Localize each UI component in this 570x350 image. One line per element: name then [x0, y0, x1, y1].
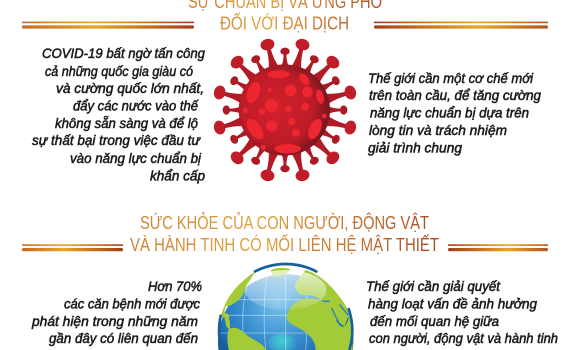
text block: COVID-19 impact: đẩy các nước vào thế: [73, 98, 199, 114]
divider bars right of second heading: [448, 244, 548, 251]
text block: global issues to address: [366, 278, 558, 346]
globe rim: [219, 264, 352, 350]
text block: global mechanism: [368, 70, 541, 156]
text block: global issues to address: đến mối quan hệ giữa: [370, 313, 499, 329]
text block: 70 percent of diseases: gần đây có liên quan đến: [49, 330, 198, 346]
text block: COVID-19 impact: [32, 45, 205, 184]
text block: global issues to address: hàng loạt vấn đề ảnh hưởng: [368, 296, 537, 312]
Africa and Eurasia: [287, 298, 353, 350]
text block: global mechanism: trên toàn cầu, để tăng cường: [369, 87, 541, 103]
text block: global issues to address: con người, động vật và hành tinh: [369, 330, 558, 346]
text block: 70 percent of diseases: phát hiện trong những năm: [31, 313, 198, 329]
text block: 70 percent of diseases: [31, 278, 202, 346]
South America: [227, 328, 266, 350]
text block: 70 percent of diseases: Hơn 70%: [148, 278, 202, 294]
heading: preparedness and response: [188, 0, 382, 34]
continents: [221, 268, 353, 350]
text block: COVID-19 impact: sự thất bại trong việc đầu tư: [32, 132, 201, 148]
text block: COVID-19 impact: COVID-19 bất ngờ tấn công: [42, 45, 205, 61]
heading: human, animal and planetary health: VÀ HÀNH TINH CÓ MỐI LIÊN HỆ MẬT THIẾT: [130, 234, 439, 255]
text block: COVID-19 impact: khẩn cấp: [150, 168, 205, 184]
divider bars left of first heading: [22, 22, 194, 29]
polar highlight: [245, 270, 326, 310]
text block: global mechanism: Thế giới cần một cơ chế mới: [368, 70, 534, 86]
text block: global issues to address: Thế giới cần giải quyết: [366, 278, 501, 294]
heading: human, animal and planetary health: SỨC KHỎE CỦA CON NGƯỜI, ĐỘNG VẬT: [140, 212, 429, 233]
text block: COVID-19 impact: cả những quốc gia giàu có: [45, 63, 193, 79]
icon: earth globe: [218, 263, 353, 350]
divider bars left of second heading: [22, 244, 123, 251]
text block: global mechanism: lòng tin và trách nhiệm: [369, 122, 507, 138]
heading: preparedness and response: ĐỐI VỚI ĐẠI DỊCH: [220, 13, 349, 34]
text block: COVID-19 impact: và cường quốc lớn nhất,: [56, 80, 204, 96]
text block: global mechanism: giải trình chung: [368, 140, 462, 156]
text block: global mechanism: năng lực chuẩn bị dựa trên: [370, 104, 529, 120]
text block: COVID-19 impact: không sẵn sàng và để lộ: [55, 115, 198, 131]
text block: 70 percent of diseases: các căn bệnh mới được: [64, 296, 200, 312]
divider bars right of first heading: [374, 22, 548, 29]
text block: COVID-19 impact: vào năng lực chuẩn bị: [70, 150, 202, 166]
icon: red coronavirus: [212, 37, 358, 183]
Red Sea and Mediterranean: [322, 301, 348, 326]
North America: [221, 271, 256, 317]
heading: human, animal and planetary health: [130, 212, 439, 255]
